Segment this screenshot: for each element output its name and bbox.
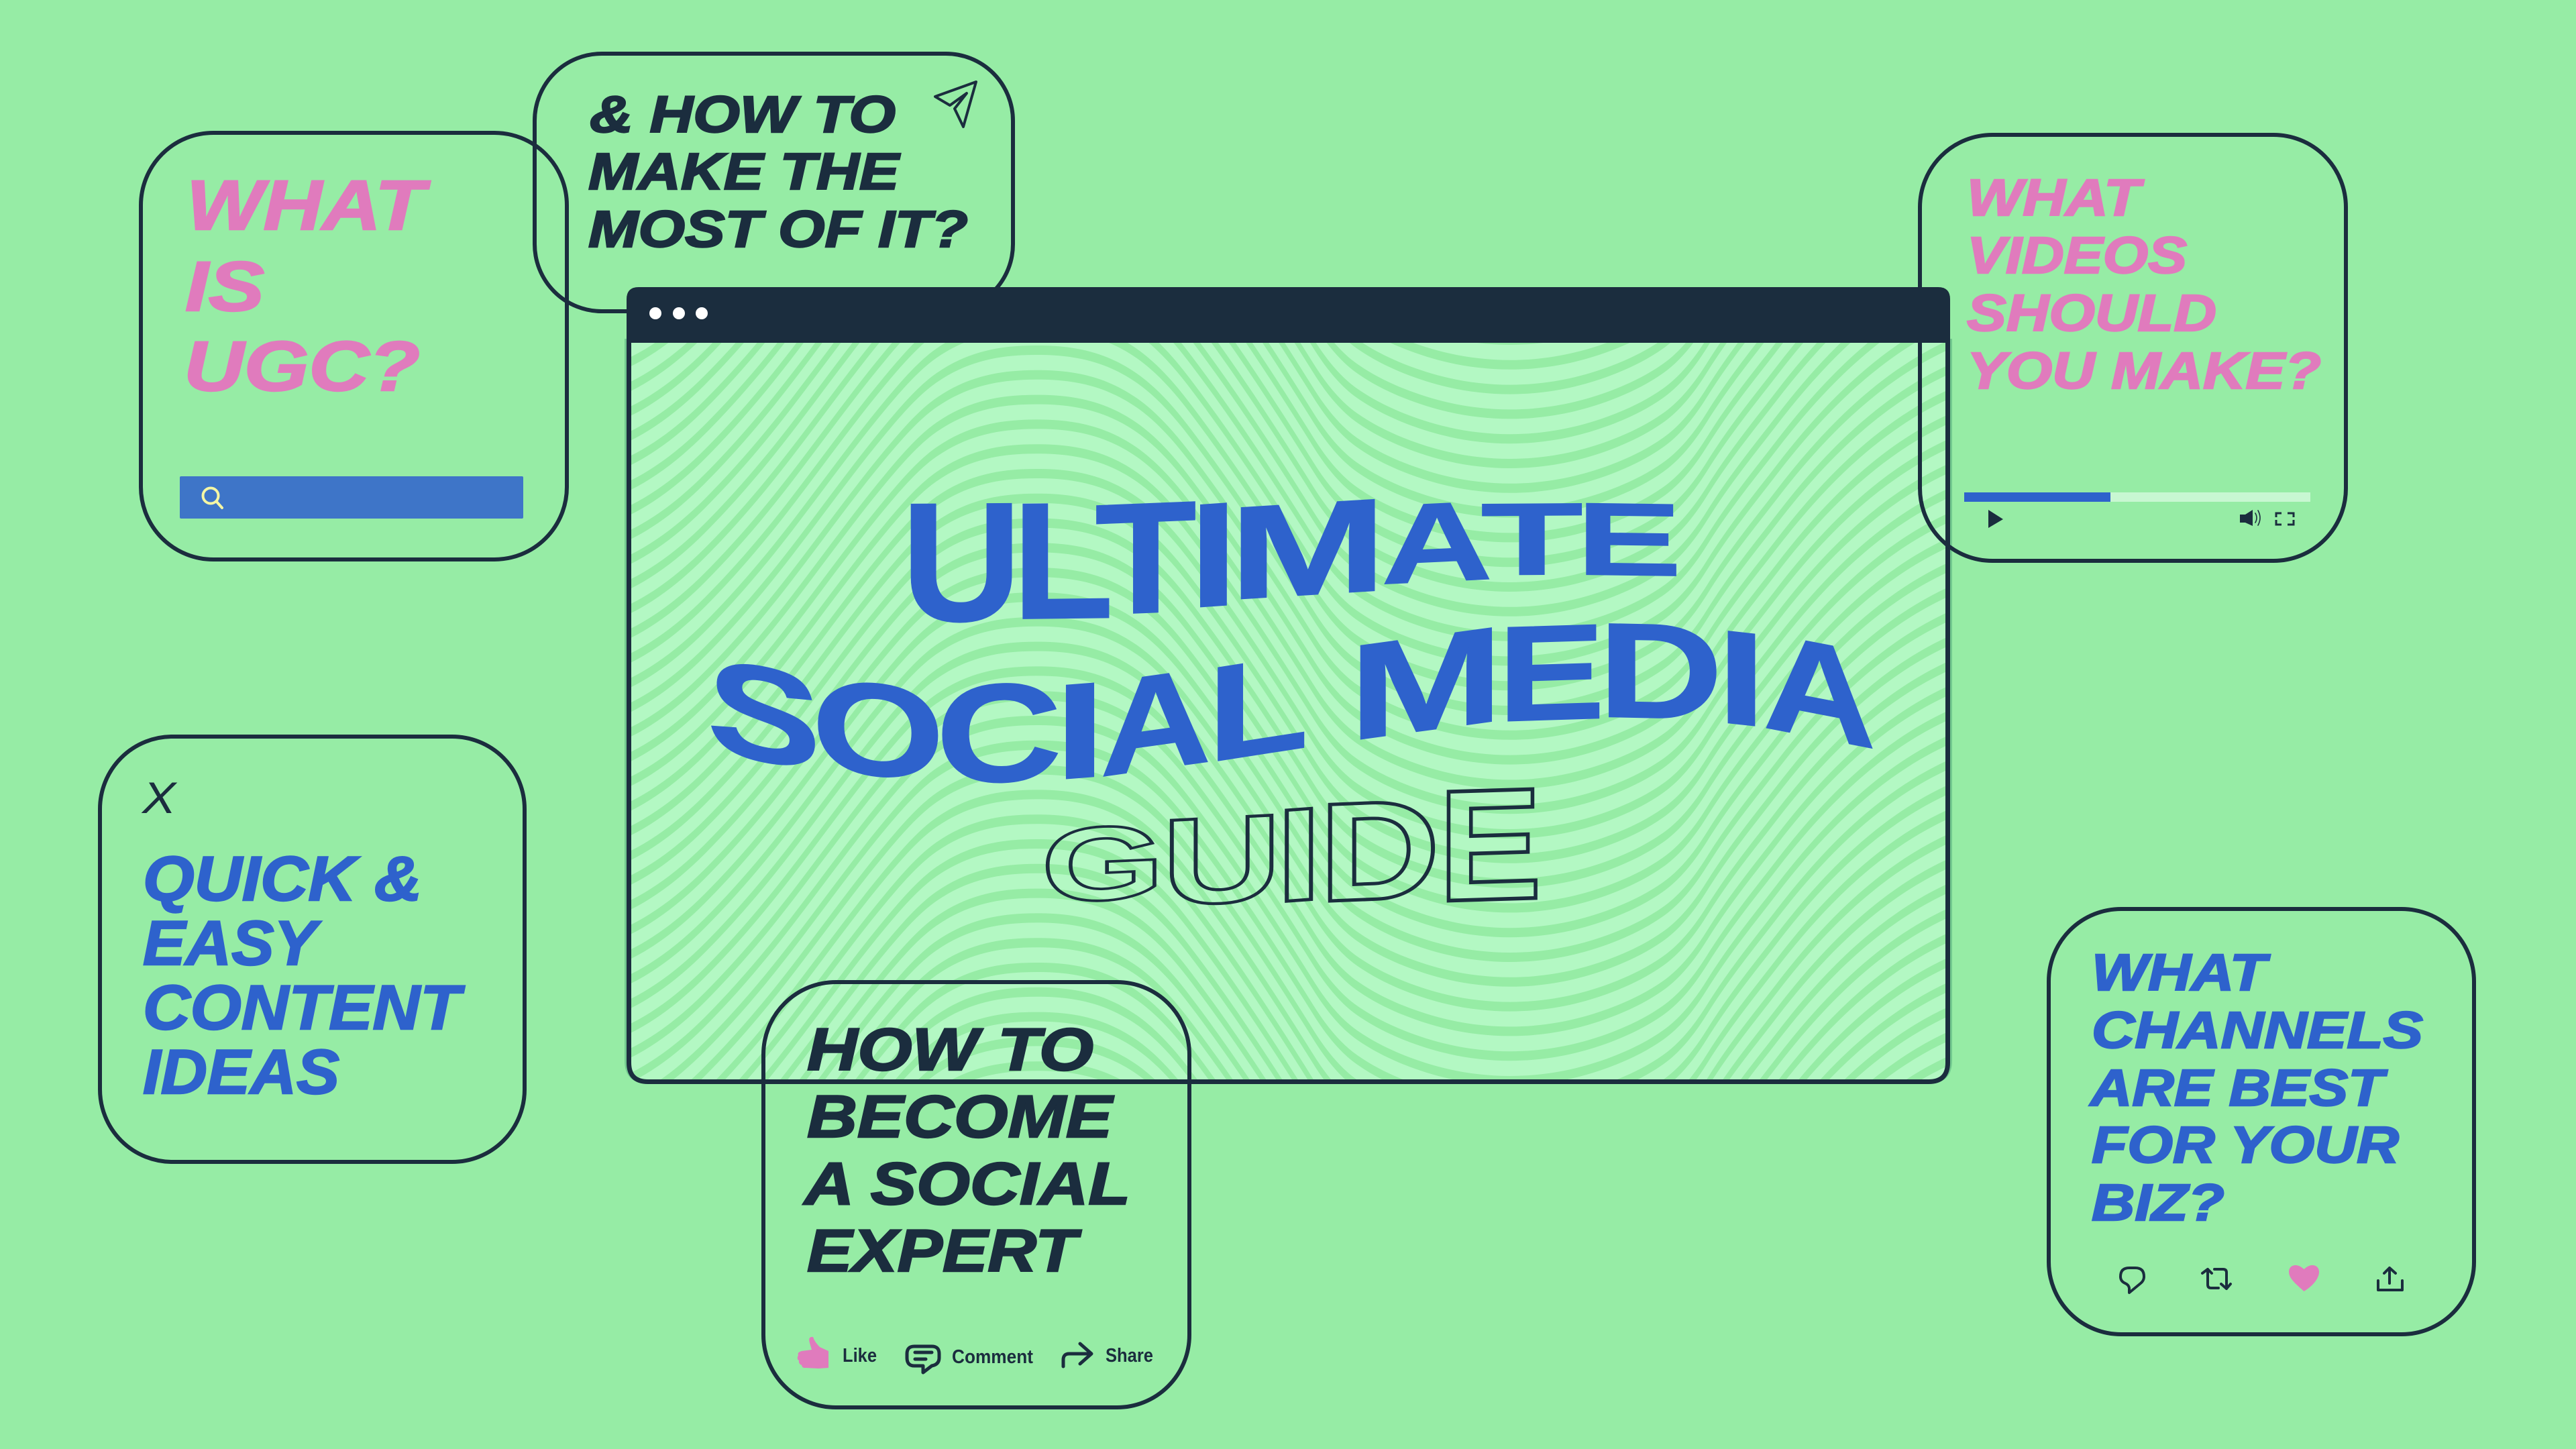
heading: make the most of it: & HOW TO bbox=[590, 86, 896, 144]
heading: what is UGC: WHAT bbox=[186, 166, 431, 245]
heading: what channels: CHANNELS bbox=[2092, 1002, 2423, 1059]
title: ULTIMATE: A bbox=[1381, 477, 1493, 608]
title: SOCIAL MEDIA bbox=[707, 595, 1876, 813]
heading: quick and easy: IDEAS bbox=[143, 1036, 339, 1107]
title: ULTIMATE: T bbox=[1095, 468, 1196, 649]
heading: what channels: WHAT bbox=[2092, 944, 2271, 1002]
heading: quick and easy: EASY bbox=[143, 908, 321, 978]
heading: what videos: YOU MAKE? bbox=[1967, 342, 2321, 400]
heading: what videos bbox=[1967, 169, 2321, 400]
heading: what is UGC: UGC? bbox=[184, 327, 420, 406]
title: SOCIAL MEDIA: A bbox=[1763, 603, 1876, 777]
window dots bbox=[649, 307, 708, 319]
icon: upload bbox=[2378, 1268, 2402, 1290]
title: SOCIAL MEDIA: I bbox=[1055, 653, 1106, 808]
panel: what is UGC bbox=[141, 133, 567, 559]
title: ULTIMATE: E bbox=[1576, 482, 1682, 598]
panel: how to make the most of it bbox=[535, 54, 1013, 311]
icon: magnifier bbox=[203, 488, 222, 508]
heading: quick and easy bbox=[143, 843, 466, 1107]
heading: become a social expert: A SOCIAL bbox=[803, 1150, 1130, 1217]
icon: play bbox=[1988, 510, 2003, 528]
label: like: Like bbox=[843, 1345, 877, 1366]
heading: what videos: SHOULD bbox=[1967, 284, 2216, 342]
icon: fullscreen bbox=[2276, 513, 2294, 525]
title: GUIDE outlined bbox=[1041, 755, 1542, 935]
panel: browser window bbox=[625, 287, 1952, 1084]
heading: become a social expert: EXPERT bbox=[807, 1217, 1082, 1284]
icon: speaker bbox=[2240, 510, 2260, 526]
panel: how to become a social expert bbox=[763, 982, 1189, 1407]
wavy background pattern bbox=[631, 343, 1945, 1079]
heading: become a social expert: BECOME bbox=[807, 1083, 1114, 1150]
heading: quick and easy: CONTENT bbox=[143, 972, 466, 1042]
search bar bbox=[180, 476, 523, 519]
heading: what channels: FOR YOUR bbox=[2092, 1116, 2399, 1174]
title: ULTIMATE: T bbox=[1481, 481, 1583, 597]
label: share: Share bbox=[1106, 1345, 1153, 1366]
title: ULTIMATE: L bbox=[1012, 468, 1114, 654]
title: SOCIAL MEDIA: I bbox=[1717, 601, 1766, 755]
panel: what channels are best bbox=[2049, 909, 2474, 1334]
title: SOCIAL MEDIA: M bbox=[1348, 597, 1503, 769]
icon: share arrow bbox=[1063, 1344, 1091, 1366]
heading: what channels: ARE BEST bbox=[2089, 1059, 2388, 1117]
icon: reply bbox=[2121, 1268, 2144, 1293]
icon: paper plane bbox=[935, 82, 976, 127]
heading: what is UGC: IS bbox=[185, 248, 264, 326]
title: GUIDE outlined: G bbox=[1041, 803, 1165, 925]
title: SOCIAL MEDIA: A bbox=[1100, 639, 1211, 806]
icon: heart bbox=[2289, 1265, 2319, 1291]
title: SOCIAL MEDIA: E bbox=[1497, 596, 1605, 751]
title: SOCIAL MEDIA: S bbox=[707, 628, 821, 801]
video progress bar bbox=[1964, 492, 2310, 502]
title: GUIDE outlined: D bbox=[1319, 769, 1440, 931]
title: GUIDE outlined: U bbox=[1162, 789, 1281, 932]
window border bbox=[629, 339, 1948, 1081]
heading: make the most of it: MAKE THE bbox=[588, 143, 901, 201]
heading: become a social expert bbox=[803, 1016, 1130, 1284]
title: ULTIMATE bbox=[902, 467, 1682, 657]
heading: make the most of it: MOST OF IT? bbox=[588, 201, 968, 258]
title: ULTIMATE: M bbox=[1229, 470, 1387, 628]
icon: retweet bbox=[2202, 1269, 2231, 1289]
heading: make the most of it bbox=[588, 86, 968, 258]
title: GUIDE outlined: E bbox=[1438, 755, 1542, 935]
heading: what videos: WHAT bbox=[1967, 169, 2145, 227]
title: SOCIAL MEDIA: L bbox=[1208, 625, 1309, 792]
icon: thumbs up bbox=[798, 1337, 828, 1368]
panel: what videos should you make bbox=[1920, 135, 2346, 561]
heading: quick and easy: QUICK & bbox=[143, 843, 422, 914]
heading: what channels: BIZ? bbox=[2092, 1174, 2224, 1232]
heading: what videos: VIDEOS bbox=[1967, 227, 2187, 284]
label: comment: Comment bbox=[952, 1346, 1033, 1368]
icon: x mark: X bbox=[141, 773, 178, 822]
heading: become a social expert: HOW TO bbox=[807, 1016, 1093, 1083]
title: SOCIAL MEDIA: O bbox=[812, 651, 945, 810]
title: ULTIMATE: U bbox=[902, 467, 1021, 657]
title: GUIDE outlined: I bbox=[1276, 779, 1322, 930]
title: ULTIMATE: I bbox=[1189, 472, 1238, 639]
window title bar bbox=[627, 287, 1950, 343]
panel: quick and easy content ideas bbox=[100, 737, 525, 1162]
title: SOCIAL MEDIA: D bbox=[1598, 595, 1723, 748]
heading: what channels bbox=[2089, 944, 2423, 1232]
heading: what is UGC bbox=[184, 166, 431, 406]
icon: comment bubble bbox=[907, 1346, 939, 1373]
title: SOCIAL MEDIA: C bbox=[936, 653, 1062, 813]
